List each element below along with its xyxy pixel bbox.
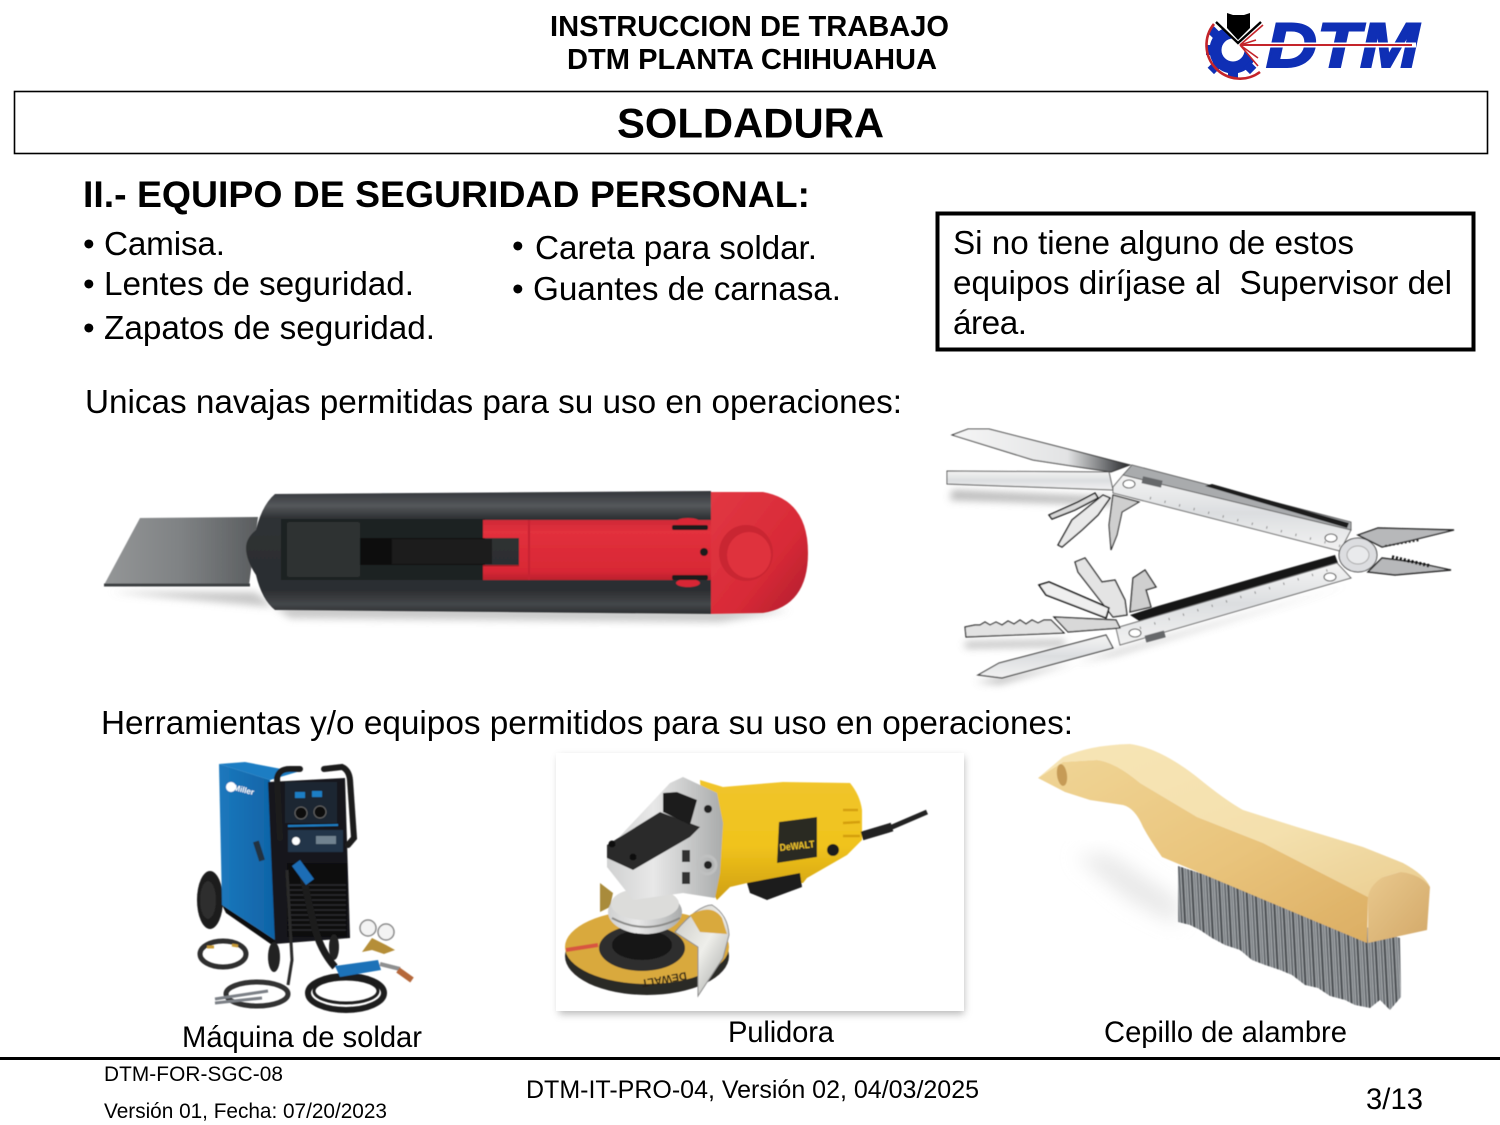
footer: DTM-IT-PRO-04, Versión 02, 04/03/2025 (526, 1076, 979, 1104)
caption: grinder: Pulidora (728, 1017, 835, 1049)
safety list right column (512, 228, 841, 308)
header title: INSTRUCCION DE TRABAJO (550, 11, 949, 43)
callout: supervisor notice (938, 214, 1474, 350)
upper handle spine (1123, 465, 1351, 530)
small coil (200, 941, 246, 967)
icon: DTM logo (1206, 11, 1421, 81)
big wheel (197, 871, 223, 929)
safety list right column: • (512, 228, 524, 265)
label (777, 817, 817, 863)
text: permitted tools: Herramientas y/o equipos permitidos para su uso en operaciones: (101, 705, 1073, 742)
regulator gauges (360, 920, 376, 936)
text: permitted knives: Unicas navajas permitidas para su uso en operaciones: (85, 384, 902, 421)
image: DeWalt angle grinder: DEWALT (640, 969, 688, 989)
footer: 3/13 (1366, 1084, 1423, 1116)
hanging hole (1056, 763, 1068, 787)
image: wire brush with wooden handle (1038, 744, 1430, 1010)
cord (862, 812, 927, 836)
footer: DTM-FOR-SGC-08 (104, 1063, 283, 1086)
saw (965, 620, 1064, 637)
guard (675, 905, 729, 996)
grinding disc (565, 917, 729, 995)
callout: supervisor notice: área. (953, 305, 1027, 342)
ground cable (287, 870, 292, 985)
image: Miller welding machine (197, 762, 412, 1010)
front (268, 778, 350, 944)
icon: DTM logo: DTM (1266, 11, 1421, 81)
safety list left column: • (83, 226, 95, 263)
image: Miller welding machine: Miller (233, 783, 255, 797)
trigger (747, 873, 802, 900)
heading: personal safety equipment: II.- EQUIPO DE SEGURIDAD PERSONAL: (83, 173, 810, 215)
grille (287, 863, 347, 937)
bristles (1178, 866, 1401, 1010)
safety list left column: Camisa. (104, 226, 225, 263)
silver gear head (607, 777, 723, 900)
top blade (952, 429, 1130, 472)
title box: SOLDADURA (14, 92, 1488, 154)
footer (0, 1058, 1500, 1123)
image: red and black safety cutter (104, 491, 808, 622)
safety list left column: • (83, 266, 95, 303)
image: DeWalt angle grinder (556, 753, 964, 1014)
file tool (947, 471, 1113, 490)
image: stainless multitool (947, 429, 1454, 684)
caption: welding machine: Máquina de soldar (182, 1022, 422, 1054)
header title: DTM PLANTA CHIHUAHUA (567, 44, 937, 76)
callout: supervisor notice: equipos diríjase al Supervisor del (953, 265, 1452, 302)
caption: wire brush: Cepillo de alambre (1104, 1017, 1347, 1049)
small tools upper (1049, 493, 1098, 519)
lower tools (1075, 558, 1127, 617)
safety list right column: • (512, 271, 524, 308)
lower handle (1116, 563, 1351, 645)
title box: SOLDADURA: SOLDADURA (617, 100, 884, 146)
safety list left column: Lentes de seguridad. (104, 266, 414, 303)
safety list right column: Careta para soldar. (535, 230, 817, 267)
safety list left column: • (83, 310, 95, 347)
footer: Versión 01, Fecha: 07/20/2023 (104, 1100, 387, 1123)
spindle collar (608, 890, 682, 934)
pliers jaws (1358, 528, 1454, 547)
image: DeWalt angle grinder: DeWALT (779, 839, 815, 854)
lower handle stripe (1130, 555, 1338, 624)
callout: supervisor notice: Si no tiene alguno de estos (953, 225, 1354, 262)
handles (277, 769, 300, 838)
torch coil (308, 976, 384, 1010)
yellow motor body (700, 780, 862, 900)
ground coil and clamp (226, 982, 288, 1006)
torch cable and gun (303, 876, 335, 967)
casters (268, 942, 280, 972)
header title (550, 11, 949, 76)
safety list left column (83, 226, 435, 347)
black top cover (607, 812, 700, 870)
safety list right column: Guantes de carnasa. (533, 271, 841, 308)
upper handle (1113, 475, 1351, 551)
small rear guard (600, 883, 613, 912)
handle side (1038, 760, 1368, 943)
safety list left column: Zapatos de seguridad. (104, 310, 435, 347)
handle end grain (1368, 872, 1430, 943)
lower blade (978, 635, 1113, 678)
side panel (219, 764, 275, 940)
handle top surface (1038, 744, 1430, 897)
pliers pivot (1339, 538, 1377, 572)
